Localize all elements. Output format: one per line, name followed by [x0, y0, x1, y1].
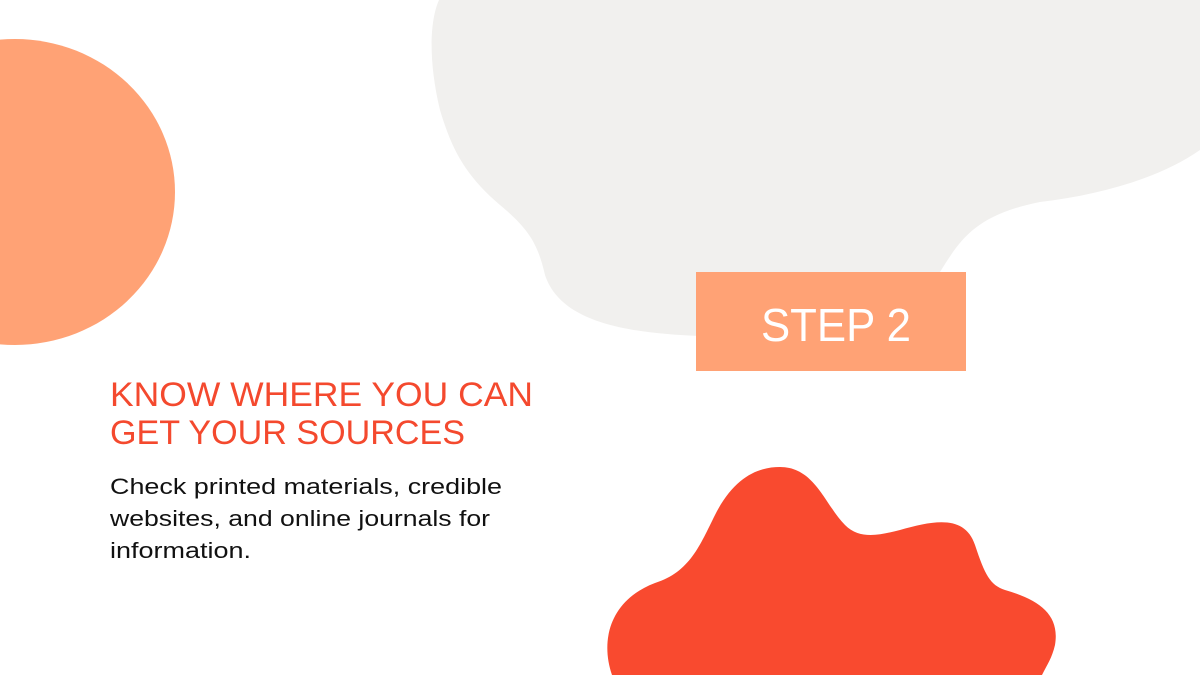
- shape: gray blob top: [432, 0, 1200, 336]
- heading: [110, 376, 533, 452]
- step box: [696, 272, 966, 371]
- shape: orange circle left: [0, 39, 175, 345]
- body text: [109, 474, 502, 563]
- heading: KNOW WHERE YOU CAN: [110, 376, 533, 414]
- body text: information.: [110, 538, 251, 563]
- step label: STEP 2: [761, 299, 911, 351]
- body text: Check printed materials, credible: [110, 474, 502, 499]
- shape: red blob bottom: [607, 467, 1056, 675]
- heading: GET YOUR SOURCES: [110, 414, 465, 452]
- body text: websites, and online journals for: [109, 506, 490, 531]
